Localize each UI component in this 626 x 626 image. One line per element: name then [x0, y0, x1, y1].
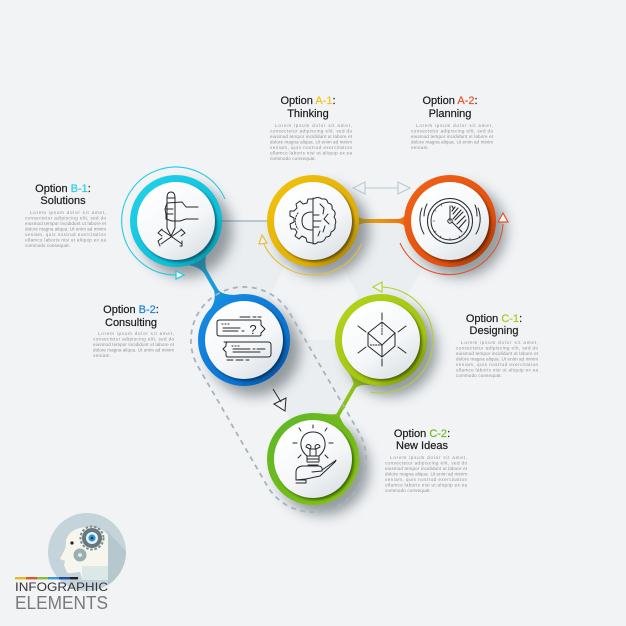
text block: Option A-1: consectetur adipiscing elit, sed do [270, 128, 352, 134]
arrow between B-2 and C-2 [273, 389, 286, 411]
node: B-1 [130, 175, 232, 277]
heading: Option A-2: [422, 95, 478, 107]
heading: Option A-1: [280, 95, 336, 107]
body: Lorem ipsum dolor sit amet, [461, 340, 538, 345]
logo: wordmark: ELEMENTS [15, 593, 108, 613]
arc arrow: C-1 lime [370, 282, 433, 393]
text block: Option C-2: dolore magna aliqua. Ut enim ad minim [385, 472, 467, 476]
text block: Option B-1: veniam, quis nostrud exercitation [25, 232, 106, 237]
text block: Option C-2: ullamco laboris nisi ut aliquip ex ea [385, 482, 467, 488]
node: C-1 [335, 294, 437, 396]
text block: Option A-1: dolore magna aliqua. Ut enim ad minim [270, 140, 352, 144]
double arrow between A-1 and A-2 [353, 182, 410, 194]
text block: Option C-2: consectetur adipiscing elit, sed do [385, 460, 467, 466]
icon text: question mark: ? [249, 322, 257, 337]
body: Lorem ipsum dolor sit amet, [275, 123, 352, 128]
text block: Option A-1: ullamco laboris nisi ut aliquip ex ea [270, 150, 352, 156]
text block: Option C-1 [456, 313, 539, 378]
text block: Option B-2: consectetur adipiscing elit, sed do [93, 336, 174, 342]
text block: Option B-1: eiusmod tempor incididunt ut labore et [25, 221, 107, 226]
text block: Option A-2: eiusmod tempor incididunt ut labore et [411, 134, 494, 139]
text block: Option A-2 [411, 95, 494, 150]
text block: Option C-2: eiusmod tempor incididunt ut labore et [385, 466, 468, 471]
arc arrow: A-1 yellow [259, 235, 362, 275]
text block: Option A-2: consectetur adipiscing elit, sed do [411, 128, 493, 134]
text block: Option B-1: consectetur adipiscing elit, sed do [25, 216, 106, 220]
text block: Option A-1: Thinking [287, 108, 329, 120]
text block: Option A-1: eiusmod tempor incididunt ut labore et [270, 134, 353, 139]
text block: Option A-2: Planning [429, 108, 471, 120]
text block: Option C-1: eiusmod tempor incididunt ut labore et [456, 351, 539, 356]
text block: Option A-1: veniam, quis nostrud exercitation [270, 145, 352, 150]
node: A-1 [267, 175, 369, 277]
body: Lorem ipsum dolor sit amet, [390, 455, 467, 460]
logo: wordmark: INFOGRAPHIC [15, 580, 108, 594]
heading: Option C-1: [466, 313, 522, 325]
text block: Option B-2: Consulting [105, 317, 157, 329]
text block: Option B-1: Solutions [40, 195, 86, 207]
text block: Option B-2 [93, 304, 175, 358]
text block: Option A-2: veniam. [411, 145, 429, 150]
icon: clock [420, 198, 480, 244]
text block: Option C-2 [385, 428, 468, 493]
text block: Option B-2: eiusmod tempor incididunt ut labore et [93, 342, 175, 347]
text block: Option C-2: veniam, quis nostrud exercitation [385, 477, 467, 482]
body: Lorem ipsum dolor sit amet, [416, 123, 493, 128]
text block: Option A-1: commodo consequat. [270, 156, 316, 161]
logo: colour bar [15, 577, 78, 579]
dashed capsule around B-2 and C-2 [191, 287, 366, 512]
text block: Option C-1: dolore magna aliqua. Ut enim ad minim [456, 356, 538, 362]
text block: Option C-1: ullamco laboris nisi ut aliquip ex ea [456, 368, 538, 372]
connector: B-1 to B-2 [188, 256, 236, 308]
node: A-2 [404, 175, 506, 277]
text block: Option B-1 [25, 183, 107, 248]
node: C-2 [267, 413, 369, 515]
text block: Option A-1 [270, 95, 353, 161]
text block: Option A-2: dolore magna aliqua. Ut enim ad minim [411, 140, 493, 144]
icon: lightbulb in hand [293, 425, 336, 483]
logo: head icon [48, 513, 126, 591]
text block: Option C-1: veniam, quis nostrud exercitation [456, 362, 538, 367]
heading: Option C-2: [394, 428, 450, 440]
logo: wordmark [15, 580, 108, 613]
icon: cube [358, 313, 406, 366]
body: Lorem ipsum dolor sit amet, [98, 331, 174, 336]
text block: Option B-1: commodo consequat. [25, 243, 70, 248]
text block: Option B-2: veniam. [93, 353, 111, 358]
node: B-2 [198, 294, 300, 396]
background triangle pattern [176, 221, 450, 459]
heading: Option B-1: [35, 183, 91, 195]
connector: A-1 to A-2 [355, 212, 407, 230]
icon: gear and brain [290, 198, 336, 244]
connector: B-1 to A-1 [215, 220, 270, 222]
body: Lorem ipsum dolor sit amet, [30, 210, 106, 215]
text block: Option C-2: New Ideas [396, 440, 448, 452]
connector: C-1 to C-2 [317, 370, 376, 430]
text block: Option C-1: Designing [470, 325, 518, 337]
text block: Option B-1: ullamco laboris nisi ut aliquip ex ea [25, 238, 106, 242]
icon: hand with pencil [158, 192, 198, 246]
heading: Option B-2: [103, 304, 159, 316]
arc arrow: A-2 red [400, 213, 508, 275]
text block: Option C-1: consectetur adipiscing elit, sed do [456, 346, 538, 350]
text block: Option B-2: dolore magna aliqua. Ut enim ad minim [93, 348, 174, 352]
text block: Option C-1: commodo consequat. [456, 373, 502, 378]
arc arrow: B-1 cyan [122, 167, 225, 279]
text block: Option C-2: commodo consequat. [385, 488, 431, 493]
text block: Option B-1: dolore magna aliqua. Ut enim ad minim [25, 226, 106, 232]
